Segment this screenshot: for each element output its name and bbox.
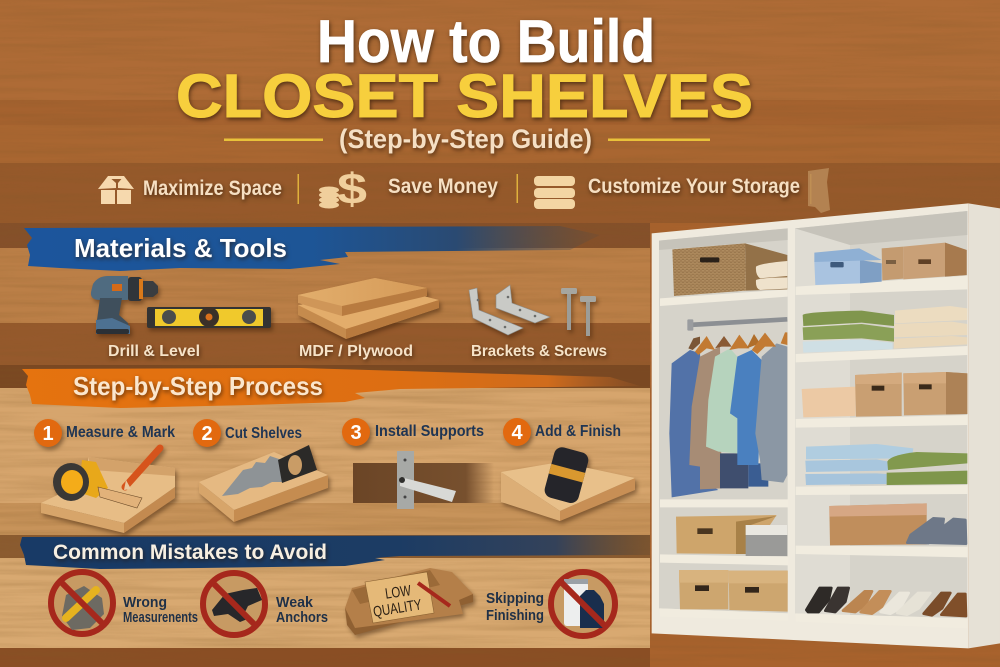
closet shelving unit — [652, 203, 1000, 648]
icon: level — [147, 307, 271, 328]
heading: mistakes: Common Mistakes to Avoid — [53, 541, 327, 564]
text: skipping finishing: Skipping — [486, 590, 544, 607]
step 3 label: Install Supports — [375, 423, 484, 440]
subtitle rule right — [608, 138, 710, 141]
heading: how to build: How to Build — [317, 8, 655, 75]
step 4 number — [503, 418, 531, 446]
icon: box — [98, 176, 134, 204]
step 1 number — [34, 419, 62, 447]
step 1 label: Measure & Mark — [66, 424, 175, 441]
folded towels — [756, 261, 787, 290]
folded cream linens — [894, 306, 967, 349]
step 4 number: 4 — [511, 422, 523, 444]
step 1 illustration: tape and pencil — [41, 448, 175, 533]
benefit: save money: Save Money — [388, 175, 498, 198]
label: drill and level: Drill & Level — [108, 343, 200, 360]
blue box — [814, 248, 882, 285]
kraft boxes bottom left — [679, 570, 788, 612]
shelves — [660, 276, 967, 628]
icon: wood boards — [298, 278, 439, 339]
icon: wrong measurements prohibited — [51, 572, 113, 634]
kraft boxes top — [882, 243, 967, 280]
sign: low quality: QUALITY — [372, 596, 423, 621]
large kraft box — [829, 503, 927, 545]
step 4 illustration: brush finish — [501, 445, 635, 521]
benefits row — [98, 165, 830, 214]
text: weak anchors — [276, 594, 328, 626]
shoes row — [806, 588, 966, 616]
unit front frame — [652, 203, 968, 648]
step 2 number: 2 — [201, 423, 213, 445]
heading: closet shelves: CLOSET SHELVES — [176, 62, 753, 130]
icon: skipping finishing prohibited — [551, 572, 615, 636]
label: mdf plywood: MDF / Plywood — [299, 343, 413, 360]
hanging rod — [687, 319, 787, 331]
heading: materials: Materials & Tools — [74, 233, 287, 263]
step 3 number — [342, 418, 370, 446]
folded blue and green towels — [805, 444, 967, 485]
grey sneakers — [907, 518, 966, 544]
subtitle: (Step-by-Step Guide) — [339, 124, 592, 154]
title — [176, 8, 753, 154]
torn wood scrap — [808, 168, 830, 213]
step 2 label: Cut Shelves — [225, 425, 302, 442]
panel: common mistakes — [20, 535, 650, 636]
text: skipping finishing: Finishing — [486, 607, 544, 624]
icon: coins and dollar — [319, 165, 367, 214]
heading: process: Step-by-Step Process — [73, 371, 323, 401]
step 1 number: 1 — [42, 423, 54, 445]
sign: low quality: LOW — [384, 582, 413, 603]
icon: brackets — [469, 285, 550, 335]
banner: process — [22, 368, 640, 408]
folded green and pale linens — [803, 311, 894, 353]
wooden hangers — [688, 332, 787, 355]
step 3 number: 3 — [350, 422, 362, 444]
grey bin — [746, 525, 787, 556]
text: wrong measurements: Measurenents — [123, 609, 198, 626]
icon: screws — [561, 288, 596, 336]
text: wrong measurements: Wrong — [123, 594, 167, 611]
benefit: maximize space: Maximize Space — [143, 177, 282, 200]
sign: low quality — [365, 572, 434, 623]
wicker basket — [672, 243, 787, 296]
icon: weak anchors prohibited — [203, 573, 265, 635]
step 2 number — [193, 419, 221, 447]
banner: mistakes — [20, 535, 650, 569]
kraft boxes middle — [802, 372, 967, 417]
icon: drill — [91, 276, 158, 334]
banner: materials — [24, 226, 600, 271]
kraft box lower left — [676, 515, 777, 554]
text: wrong measurements — [123, 594, 198, 626]
text: weak anchors: Anchors — [276, 609, 328, 626]
icon: coins and dollar: $ — [337, 165, 367, 214]
text: skipping finishing — [486, 590, 544, 624]
label: brackets and screws: Brackets & Screws — [471, 343, 607, 360]
step 4 label: Add & Finish — [535, 423, 621, 440]
icon: low quality wood pile — [345, 568, 473, 635]
icon: stack — [534, 176, 575, 209]
step 3 illustration: wall bracket — [353, 451, 494, 509]
hanging clothes — [669, 343, 787, 497]
back panels — [659, 211, 967, 618]
unit side — [968, 203, 1000, 648]
panel: step by step process — [22, 368, 640, 533]
text: weak anchors: Weak — [276, 594, 314, 611]
subtitle rule left — [224, 138, 323, 141]
benefit: customize your storage: Customize Your Storage — [588, 175, 800, 198]
step 2 illustration: saw — [199, 445, 328, 522]
panel: materials and tools — [24, 226, 607, 360]
